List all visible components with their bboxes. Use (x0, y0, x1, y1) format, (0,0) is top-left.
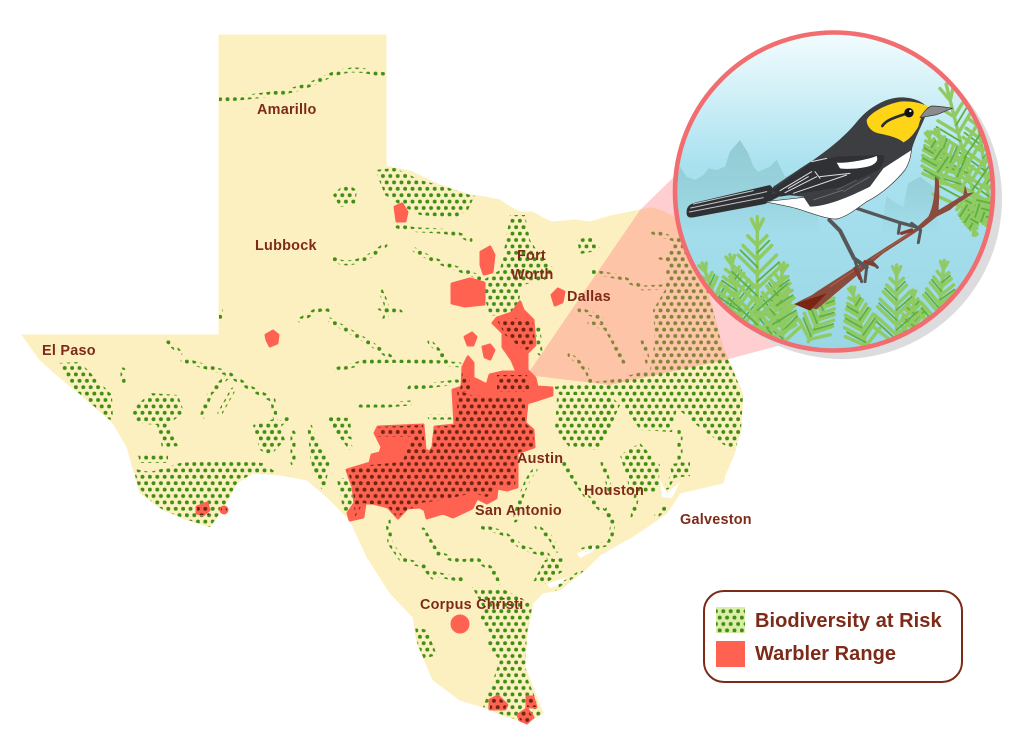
bird body (772, 97, 928, 207)
foliage bottom right (842, 258, 956, 346)
medallion ring (675, 32, 993, 350)
city labels: Houston (584, 483, 644, 499)
foliage bottom left (697, 215, 836, 344)
city labels: Austin (517, 451, 563, 467)
warbler range (197, 204, 564, 723)
city labels: San Antonio (475, 503, 562, 519)
city labels: Worth (511, 267, 554, 283)
branch (794, 177, 974, 311)
swatch: biodiversity at risk (716, 607, 745, 633)
state outline (22, 35, 743, 723)
city labels: Lubbock (255, 238, 317, 254)
distant treeline (678, 140, 934, 214)
city labels: El Paso (42, 343, 96, 359)
warbler range overlapping biodiversity (197, 318, 536, 723)
swatch: warbler range (716, 641, 745, 667)
city labels (42, 102, 752, 613)
biodiversity at risk areas (58, 70, 745, 722)
bird tail (687, 185, 780, 218)
illustration scene (670, 75, 1020, 353)
city labels: Dallas (567, 289, 611, 305)
bird legs (829, 208, 921, 282)
city labels: Corpus Christi (420, 597, 523, 613)
sky background (676, 34, 992, 350)
bird face (867, 101, 953, 142)
label: warbler range: Warbler Range (755, 643, 896, 665)
legend (704, 591, 962, 682)
city labels: Fort (517, 248, 546, 264)
map: Texas (22, 35, 800, 723)
city labels: Amarillo (257, 102, 317, 118)
label: biodiversity at risk: Biodiversity at Risk (755, 610, 942, 632)
bird wing (772, 155, 884, 200)
city labels: Galveston (680, 512, 752, 528)
foliage top right (920, 82, 991, 237)
legend frame (704, 591, 962, 682)
river corridors (123, 70, 683, 583)
medallion shadow (682, 39, 1002, 359)
gulf coast inlets (532, 480, 680, 682)
bird belly (765, 148, 912, 219)
bird illustration circle (670, 32, 1020, 359)
zoom beam overlay (527, 165, 800, 385)
